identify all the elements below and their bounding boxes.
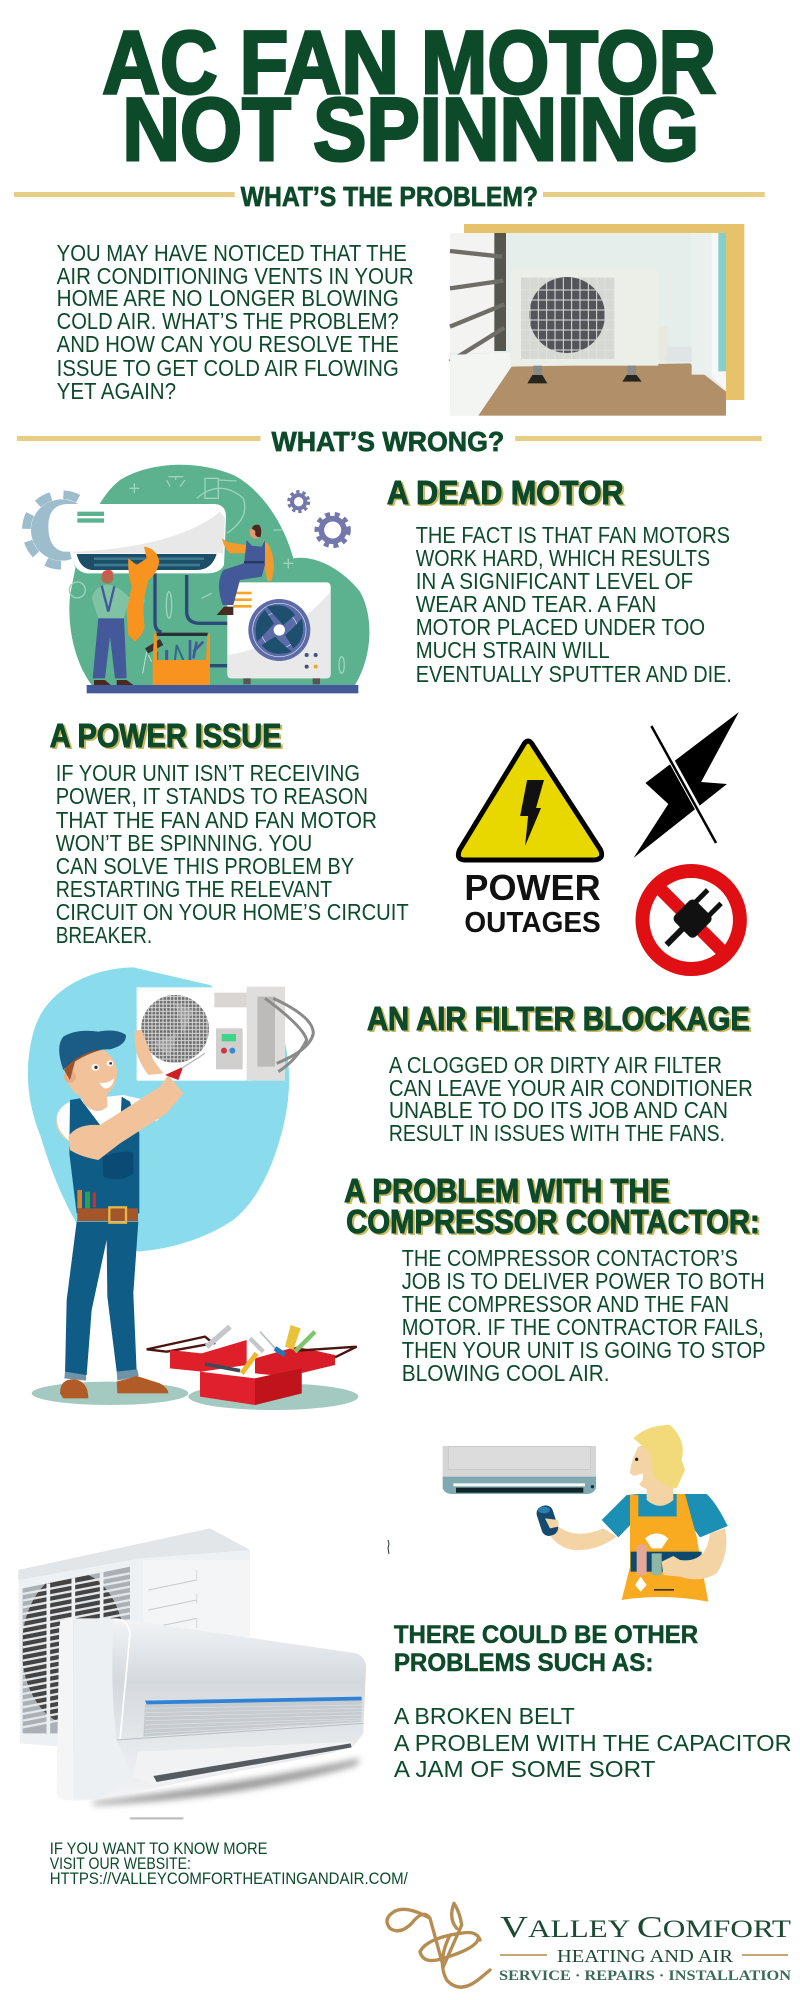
heading: an air filter blockage: AN AIR FILTER BLOCKAGE xyxy=(367,1000,750,1037)
text block: power issue: THAT THE FAN AND FAN MOTOR xyxy=(56,807,377,833)
heading: what's wrong xyxy=(17,426,762,457)
text block: power issue: BREAKER. xyxy=(56,922,152,948)
text block: dead motor: IN A SIGNIFICANT LEVEL OF xyxy=(416,568,693,594)
background icons xyxy=(69,477,344,673)
heading: compressor contactor: A PROBLEM WITH THE xyxy=(344,1172,669,1209)
wrench xyxy=(127,547,159,642)
legs xyxy=(65,1222,138,1375)
title: AC FAN MOTOR xyxy=(102,13,716,112)
shirt xyxy=(602,1494,728,1537)
text block: compressor contactor: BLOWING COOL AIR. xyxy=(402,1360,610,1386)
illustration: technician fixing wall unit xyxy=(28,967,358,1410)
neck and face xyxy=(647,1483,673,1506)
text block: dead motor: EVENTUALLY SPUTTER AND DIE. xyxy=(416,661,732,687)
text block: intro: COLD AIR. WHAT’S THE PROBLEM? xyxy=(57,308,399,334)
icon: power outages warning sign: OUTAGES xyxy=(464,907,601,939)
text block: dead motor: WEAR AND TEAR. A FAN xyxy=(416,591,656,617)
worker left xyxy=(92,570,145,685)
monogram xyxy=(387,1903,490,1987)
stray mark xyxy=(388,1540,389,1554)
text block: power issue xyxy=(56,760,409,948)
hair xyxy=(633,1425,685,1488)
text block: dead motor: MOTOR PLACED UNDER TOO xyxy=(416,614,705,640)
text block: website: IF YOU WANT TO KNOW MORE xyxy=(50,1840,268,1858)
shadow xyxy=(93,1758,360,1805)
icon: crossed lightning bolt xyxy=(633,712,739,858)
blue stripe xyxy=(145,1697,362,1704)
indoor unit xyxy=(48,504,226,573)
text block: dead motor: WORK HARD, WHICH RESULTS xyxy=(416,545,710,571)
right arm xyxy=(662,1528,726,1579)
heading: a dead motor: A DEAD MOTOR xyxy=(389,475,626,513)
green blob xyxy=(69,465,369,685)
icon: no plug sign xyxy=(642,871,740,969)
shoes xyxy=(60,1379,88,1398)
illustration: split air conditioner xyxy=(18,1528,366,1819)
tool belt xyxy=(77,1190,82,1208)
wall AC xyxy=(443,1446,596,1477)
text block: compressor contactor xyxy=(402,1245,766,1386)
toolbox xyxy=(147,1325,357,1405)
apron xyxy=(622,1494,708,1602)
blue blob xyxy=(28,967,289,1252)
worker right xyxy=(217,525,274,615)
text block: website xyxy=(50,1840,408,1888)
apron details xyxy=(645,1533,668,1548)
heading: what's wrong: WHAT’S WRONG? xyxy=(271,426,504,457)
screwdriver xyxy=(165,1067,183,1080)
text block: intro: ISSUE TO GET COLD AIR FLOWING xyxy=(57,355,399,381)
text block: website: HTTPS://VALLEYCOMFORTHEATINGANDAIR.COM/ xyxy=(50,1870,408,1888)
text block: air filter: RESULT IN ISSUES WITH THE FANS. xyxy=(389,1120,725,1146)
indoor unit xyxy=(57,1618,366,1800)
text block: intro: YET AGAIN? xyxy=(57,378,176,404)
heading: other problems: THERE COULD BE OTHER xyxy=(394,1621,698,1649)
text block: power issue: IF YOUR UNIT ISN’T RECEIVING xyxy=(56,760,360,786)
text block: compressor contactor: THE COMPRESSOR AND THE FAN xyxy=(402,1291,729,1317)
text block: power issue: RESTARTING THE RELEVANT xyxy=(56,876,332,902)
text block: power issue: CIRCUIT ON YOUR HOME’S CIRCUIT xyxy=(56,899,409,925)
title xyxy=(102,13,716,179)
logo: Valley Comfort xyxy=(387,1903,791,1987)
heading: other problems xyxy=(394,1621,698,1677)
heading: compressor contactor: A PROBLEM WITH THE xyxy=(346,1173,671,1211)
small gears xyxy=(289,492,349,546)
text block: air filter: CAN LEAVE YOUR AIR CONDITIONER xyxy=(389,1075,753,1101)
shirt xyxy=(57,1095,160,1142)
floor bar xyxy=(87,685,358,693)
cap xyxy=(59,1031,126,1070)
gear xyxy=(26,495,97,565)
text block: air filter: UNABLE TO DO ITS JOB AND CAN xyxy=(389,1097,728,1123)
text block: air filter xyxy=(389,1052,753,1146)
outdoor unit xyxy=(227,582,331,678)
heading: a power issue: A POWER ISSUE xyxy=(50,717,281,754)
text block: dead motor: THE FACT IS THAT FAN MOTORS xyxy=(416,522,730,548)
heading: what's the problem xyxy=(14,181,765,212)
toolbox xyxy=(143,633,210,685)
wall unit xyxy=(137,987,253,1081)
lower section xyxy=(133,1742,353,1785)
text block: power issue: WON’T BE SPINNING. YOU xyxy=(56,830,312,856)
shadows xyxy=(32,1382,188,1405)
text block: dead motor: MUCH STRAIN WILL xyxy=(416,637,610,663)
text block: power issue: POWER, IT STANDS TO REASON xyxy=(56,783,368,809)
heading: an air filter blockage: AN AIR FILTER BLOCKAGE xyxy=(369,1001,752,1039)
grille xyxy=(143,1700,362,1737)
text block: intro: HOME ARE NO LONGER BLOWING xyxy=(57,285,399,311)
text block: intro xyxy=(57,240,414,404)
text block: air filter: A CLOGGED OR DIRTY AIR FILTER xyxy=(389,1052,722,1078)
illustration: repairman with remote xyxy=(443,1425,728,1602)
text block: intro: YOU MAY HAVE NOTICED THAT THE xyxy=(57,240,407,266)
heading: other problems: PROBLEMS SUCH AS: xyxy=(394,1649,653,1677)
title: NOT SPINNING xyxy=(122,80,699,179)
icon: power outages warning sign: POWER xyxy=(464,868,601,908)
overalls xyxy=(69,1097,139,1213)
text block: dead motor xyxy=(416,522,732,687)
heading: compressor contactor: COMPRESSOR CONTACTOR: xyxy=(346,1203,760,1240)
neck and arm xyxy=(80,1088,107,1111)
pipes xyxy=(155,573,228,666)
text block: other problems list xyxy=(394,1703,792,1782)
left arm with remote xyxy=(545,1518,617,1550)
text block: other problems list: A PROBLEM WITH THE CAPACITOR xyxy=(394,1730,792,1756)
head xyxy=(66,1047,117,1099)
logo: Valley Comfort: VALLEY COMFORT xyxy=(500,1909,791,1944)
outdoor unit xyxy=(18,1528,250,1747)
heading: compressor contactor: COMPRESSOR CONTACTOR: xyxy=(348,1204,762,1242)
text block: intro: AND HOW CAN YOU RESOLVE THE xyxy=(57,331,399,357)
photo: outdoor AC unit with gold frame xyxy=(450,224,744,416)
text block: intro: AIR CONDITIONING VENTS IN YOUR xyxy=(57,263,414,289)
text block: compressor contactor: THE COMPRESSOR CONTACTOR’S xyxy=(402,1245,738,1271)
text block: website: VISIT OUR WEBSITE: xyxy=(50,1855,191,1873)
text block: other problems list: A JAM OF SOME SORT xyxy=(394,1756,655,1782)
heading: what's the problem: WHAT’S THE PROBLEM? xyxy=(241,181,538,212)
heading: a power issue: A POWER ISSUE xyxy=(52,718,283,756)
heading: compressor contactor xyxy=(344,1172,762,1242)
logo: Valley Comfort: HEATING AND AIR xyxy=(557,1946,733,1966)
text block: power issue: CAN SOLVE THIS PROBLEM BY xyxy=(56,853,354,879)
text block: other problems list: A BROKEN BELT xyxy=(394,1703,575,1729)
illustration: technicians repairing AC xyxy=(26,465,369,693)
icon: power outages warning sign xyxy=(458,741,602,939)
logo: Valley Comfort: SERVICE · REPAIRS · INSTALLATION xyxy=(499,1968,791,1984)
heading: a dead motor: A DEAD MOTOR xyxy=(387,474,624,511)
